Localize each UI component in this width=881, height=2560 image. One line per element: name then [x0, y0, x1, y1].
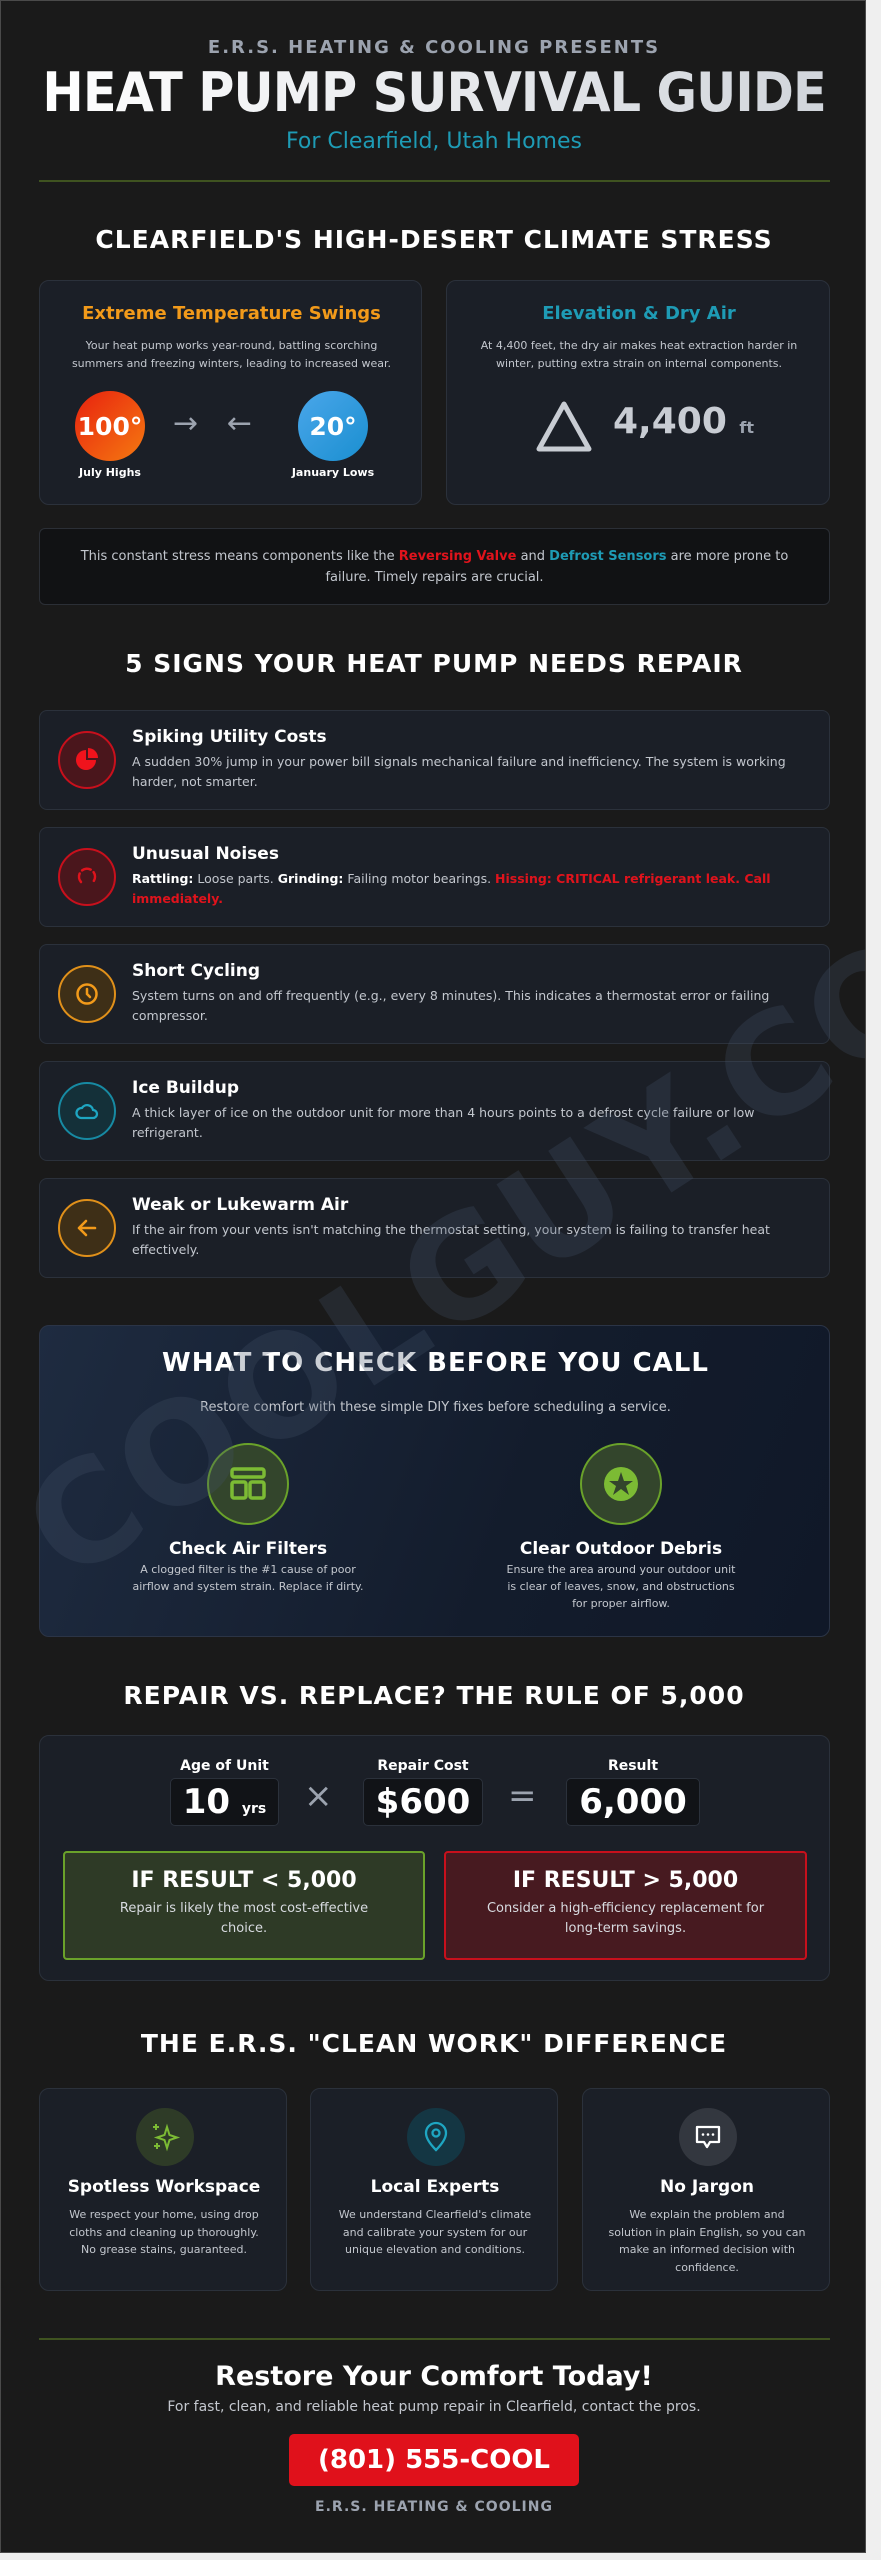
result: repair: IF RESULT < 5,000	[131, 1868, 357, 1893]
sign: short cycling: System turns on and off frequently (e.g., every 8 minutes). This indicates a thermostat error or failing compressor.	[132, 988, 769, 1023]
subtitle: For Clearfield, Utah Homes	[286, 129, 582, 154]
factor: age: 10 yrs	[183, 1782, 266, 1822]
icon: pin	[407, 2108, 465, 2166]
phone button	[289, 2434, 579, 2486]
icon: arrow	[58, 1199, 116, 1257]
result: replace: IF RESULT > 5,000	[513, 1868, 738, 1893]
icon: sparkle	[136, 2108, 194, 2166]
sign: short cycling	[39, 944, 830, 1044]
item: debris	[507, 1443, 736, 1610]
heading: climate stress: CLEARFIELD'S HIGH-DESERT CLIMATE STRESS	[95, 225, 773, 254]
result: replace: Consider a high-efficiency replacement for	[487, 1901, 764, 1916]
CTA heading: Restore Your Comfort Today!	[215, 2361, 653, 2392]
arrows: → ←	[173, 406, 252, 441]
factor: age: Age of Unit	[180, 1758, 269, 1774]
hot circle	[75, 391, 145, 461]
panel heading: Elevation & Dry Air	[542, 303, 736, 324]
cold circle: 20°	[309, 412, 357, 440]
item: filters: A clogged filter is the #1 cause of poor airflow and system strain. Replace if dirty.	[132, 1563, 364, 1593]
intro text: Restore comfort with these simple DIY fixes before scheduling a service.	[200, 1400, 671, 1415]
item: filters	[132, 1443, 364, 1593]
result: 6,000	[579, 1782, 687, 1822]
result: replace	[444, 1851, 807, 1960]
note box: This constant stress means components like the Reversing Valve and Defrost Sensors are more prone to failure. Timely repairs are crucial.	[81, 549, 788, 585]
sign: ice	[39, 1061, 830, 1161]
sign: ice: A thick layer of ice on the outdoor unit for more than 4 hours points to a defrost cycle failure or low refrigerant.	[132, 1105, 755, 1140]
sign: utility costs: Spiking Utility Costs	[132, 727, 327, 747]
note box	[39, 528, 830, 605]
result: Result	[608, 1758, 658, 1774]
item: debris: Clear Outdoor Debris	[520, 1539, 722, 1559]
times sign: ×	[304, 1776, 332, 1816]
card: spotless: We respect your home, using drop cloths and cleaning up thoroughly. No grease stains, guaranteed.	[69, 2208, 259, 2256]
sign: noises: Unusual Noises	[132, 844, 279, 864]
panel: rule of 5000	[39, 1735, 830, 1981]
sign: ice: Ice Buildup	[132, 1078, 239, 1098]
sign: utility costs: A sudden 30% jump in your power bill signals mechanical failure and inefficiency. The system is working harder, not smarter.	[132, 754, 786, 789]
panel text: Your heat pump works year-round, battling scorching summers and freezing winters, leading to increased wear.	[72, 339, 391, 370]
heading: rule of 5000: REPAIR VS. REPLACE? THE RULE OF 5,000	[123, 1681, 745, 1710]
result	[566, 1758, 700, 1826]
icon: chat	[679, 2108, 737, 2166]
hot circle: 100°	[78, 412, 142, 440]
card: local experts: Local Experts	[371, 2177, 499, 2197]
item: debris: Ensure the area around your outdoor unit is clear of leaves, snow, and obstructions for proper airflow.	[507, 1563, 735, 1610]
factor: cost: $600	[376, 1782, 470, 1822]
card: no jargon: No Jargon	[660, 2177, 754, 2197]
sign: noises: Rattling: Loose parts. Grinding: Failing motor bearings. Hissing: CRITICAL refrigerant leak. Call immediately.	[132, 871, 771, 906]
sign: short cycling: Short Cycling	[132, 961, 260, 981]
equals sign: =	[508, 1776, 536, 1816]
CTA text: For fast, clean, and reliable heat pump repair in Clearfield, contact the pros.	[167, 2399, 701, 2415]
card: local experts	[310, 2088, 558, 2291]
icon: mountain triangle	[536, 402, 592, 452]
sign: noises	[39, 827, 830, 927]
icon: clock	[58, 965, 116, 1023]
card: no jargon: We explain the problem and solution in plain English, so you can make an informed decision with confidence.	[608, 2208, 806, 2274]
panel heading: WHAT TO CHECK BEFORE YOU CALL	[162, 1348, 709, 1378]
label hot: July Highs	[79, 466, 141, 479]
heading: 5 signs: 5 SIGNS YOUR HEAT PUMP NEEDS REPAIR	[125, 649, 743, 678]
icon: sound	[58, 848, 116, 906]
pre-title: E.R.S. HEATING & COOLING PRESENTS	[208, 37, 660, 58]
sign: weak air: Weak or Lukewarm Air	[132, 1195, 348, 1215]
factor: age	[170, 1758, 279, 1826]
icon: fan	[580, 1443, 662, 1525]
panel: temperature swings	[39, 280, 422, 505]
card: local experts: We understand Clearfield's climate and calibrate your system for our unique elevation and conditions.	[339, 2208, 531, 2256]
panel text: At 4,400 feet, the dry air makes heat extraction harder in winter, putting extra strain on internal components.	[481, 339, 797, 370]
result: replace: long-term savings.	[565, 1921, 686, 1936]
item: filters: Check Air Filters	[169, 1539, 327, 1559]
elevation value: 4,400 ft	[613, 401, 754, 442]
card: no jargon	[582, 2088, 830, 2291]
sign: weak air: If the air from your vents isn't matching the thermostat setting, your system is failing to transfer heat effectively.	[132, 1222, 770, 1257]
label cold: January Lows	[292, 466, 374, 479]
footer brand: E.R.S. HEATING & COOLING	[315, 2499, 553, 2515]
icon: filter	[207, 1443, 289, 1525]
icon: cloud	[58, 1082, 116, 1140]
sign: utility costs	[39, 710, 830, 810]
card: spotless: Spotless Workspace	[68, 2177, 260, 2197]
factor: cost	[363, 1758, 483, 1826]
icon: pie	[58, 731, 116, 789]
panel: DIY checks	[39, 1325, 830, 1637]
result: repair: Repair is likely the most cost-effective choice.	[120, 1901, 368, 1936]
factor: cost: Repair Cost	[377, 1758, 469, 1774]
card: spotless	[39, 2088, 287, 2291]
sign: weak air	[39, 1178, 830, 1278]
result: repair	[63, 1851, 425, 1960]
panel heading: Extreme Temperature Swings	[82, 303, 381, 324]
title: HEAT PUMP SURVIVAL GUIDE	[42, 61, 826, 124]
panel: elevation	[446, 280, 830, 505]
cold circle	[298, 391, 368, 461]
phone button: (801) 555-COOL	[318, 2445, 550, 2475]
heading: clean work: THE E.R.S. "CLEAN WORK" DIFFERENCE	[141, 2029, 727, 2058]
